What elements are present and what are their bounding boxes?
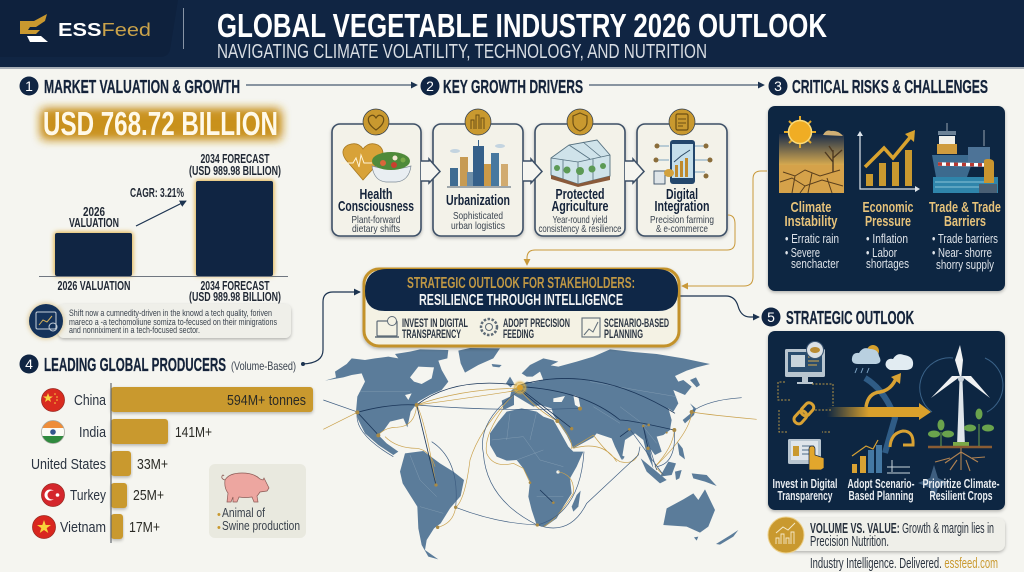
volume vs value callout xyxy=(768,517,1005,553)
swine production card: Animal of xyxy=(222,506,265,520)
section heading 1: 1 xyxy=(25,78,33,94)
panel: strategic outlook actions xyxy=(768,331,1005,510)
section heading 2: 2 xyxy=(426,78,434,94)
column: trade barriers: • Near- shorre xyxy=(932,246,992,260)
section heading 3: 3 xyxy=(774,78,782,94)
market value headline: USD 768.72 BILLION xyxy=(43,105,278,142)
column: climate instability: Climate xyxy=(790,199,832,216)
producers bar chart xyxy=(31,383,313,543)
swine production card: • xyxy=(217,509,221,521)
section heading 1 xyxy=(20,76,240,97)
connector: drivers to strategic box xyxy=(527,215,735,265)
column: economic pressure: Pressure xyxy=(865,213,911,230)
driver arrows between cards xyxy=(421,159,644,183)
section heading 2: KEY GROWTH DRIVERS xyxy=(443,76,583,97)
bar: 2026 valuation: 2026 VALUATION xyxy=(58,279,130,293)
swine production card: • xyxy=(217,522,221,534)
driver card: digital integration: Integration xyxy=(654,198,710,215)
column: trade barriers xyxy=(929,123,1001,272)
bar: 2034 forecast: 2034 FORECAST xyxy=(200,279,270,293)
driver card: protected agriculture xyxy=(535,109,625,236)
section heading 5 xyxy=(762,307,914,328)
item: precision feeding: FEEDING xyxy=(503,327,534,341)
column: climate instability: • Severe xyxy=(785,246,820,260)
item: digital transparency: TRANSPARENCY xyxy=(402,327,461,341)
bar: 2034 forecast: (USD 989.98 BILLION) xyxy=(189,164,281,178)
icon: heart and salad xyxy=(341,144,411,182)
note text: and nonniximent in a tech-focused sector. xyxy=(69,325,200,336)
row: United States: United States xyxy=(31,457,106,473)
row: Turkey: Turkey xyxy=(70,488,107,504)
driver card: health consciousness: dietary shifts xyxy=(352,223,400,235)
row: India: India xyxy=(79,425,107,441)
row: United States: 33M+ xyxy=(137,457,168,473)
callout text: Precision Nutrition. xyxy=(810,533,889,550)
column: trade barriers: Barriers xyxy=(944,213,986,230)
bar: 2026 valuation: VALUATION xyxy=(69,216,119,230)
driver card: health consciousness: Health xyxy=(360,186,392,203)
row: India: 141M+ xyxy=(175,425,212,441)
column: digital transparency: Transparency xyxy=(778,489,833,503)
icon badge xyxy=(567,109,593,135)
note text: Shift now a cumnedity-driven in the knowd a tech quality, foriven xyxy=(69,308,272,319)
driver card: health consciousness: Plant-forward xyxy=(352,214,401,226)
icon: clouds and charts xyxy=(827,345,931,473)
box heading: STRATEGIC OUTLOOK FOR STAKEHOLDERS: xyxy=(407,275,635,292)
connector: producers to strategic box xyxy=(303,292,360,364)
driver card: protected agriculture: Agriculture xyxy=(552,198,608,215)
CAGR arrow and label xyxy=(130,186,186,226)
driver card: protected agriculture: consistency & resilience xyxy=(538,223,622,235)
strategic outlook box: RESILIENCE THROUGH INTELLIGENCE xyxy=(419,292,623,309)
icon: greenhouse xyxy=(551,140,610,187)
icon badge xyxy=(363,109,389,135)
item: scenario planning: PLANNING xyxy=(604,327,643,341)
header banner xyxy=(0,0,1024,69)
item: scenario planning xyxy=(582,316,669,341)
row: India xyxy=(41,419,212,444)
row: China xyxy=(42,387,313,412)
icon: rising chart xyxy=(857,130,920,192)
row: China: 594M+ tonnes xyxy=(227,393,306,409)
bar: 2034 forecast xyxy=(189,152,281,304)
driver card: protected agriculture: Year-round yield xyxy=(552,214,608,226)
driver card: digital integration: & e-commerce xyxy=(656,223,708,235)
world trade map xyxy=(323,348,757,559)
section heading 4: (Volume-Based) xyxy=(231,359,296,373)
column: economic pressure: Economic xyxy=(862,199,914,216)
row: China: China xyxy=(74,393,107,409)
column: economic pressure: • Labor xyxy=(866,246,897,260)
icon: city skyline xyxy=(447,140,511,187)
swine production card xyxy=(209,464,306,538)
column: climate instability: • Erratic rain xyxy=(785,232,839,246)
inland seas and lakes xyxy=(405,367,581,474)
icon badge xyxy=(465,109,491,135)
row: Vietnam: Vietnam xyxy=(60,520,106,536)
bar chart: market growth xyxy=(39,152,288,304)
icon: tech dashboard xyxy=(28,303,64,339)
driver card: health consciousness: Consciousness xyxy=(338,198,414,215)
market note callout xyxy=(28,303,291,339)
logo wordmark: ESS Feed xyxy=(58,19,151,40)
section heading 2 xyxy=(420,76,583,97)
subtitle: NAVIGATING CLIMATE VOLATILITY, TECHNOLOGY, AND NUTRITION xyxy=(217,41,707,63)
arrow: section 1 to 2 xyxy=(246,84,417,86)
icon: pig xyxy=(222,473,269,502)
column: trade barriers: shorry supply xyxy=(936,258,995,272)
column: resilient crops: Resilient Crops xyxy=(930,489,993,503)
icon: monitor and chain xyxy=(778,342,833,470)
bar: 2034 forecast: (USD 989.98 BILLION) xyxy=(189,290,281,304)
callout text xyxy=(810,520,994,550)
column: economic pressure xyxy=(857,130,920,271)
column: climate instability xyxy=(779,116,844,271)
driver card: digital integration: Precision farming xyxy=(650,214,714,226)
section heading 1: MARKET VALUATION & GROWTH xyxy=(44,76,240,97)
column: scenario planning xyxy=(827,345,931,503)
bar: 2034 forecast: 2034 FORECAST xyxy=(200,152,270,166)
row: United States xyxy=(31,451,168,476)
connector: risks to strategic box xyxy=(682,171,767,286)
Europe hub xyxy=(513,381,527,394)
note text: mareco a -a techomoliune somiza to-fecused on their minigrations xyxy=(69,317,277,328)
swine production card: Swine production xyxy=(222,519,300,533)
landmasses xyxy=(325,348,738,559)
driver card: urbanization: Sophisticated xyxy=(453,210,503,222)
arrow: section 2 to 3 xyxy=(589,84,764,86)
trade routes xyxy=(323,378,757,528)
item: digital transparency xyxy=(375,316,468,341)
title: GLOBAL VEGETABLE INDUSTRY 2026 OUTLOOK xyxy=(217,7,827,44)
item: scenario planning: SCENARIO-BASED xyxy=(604,316,669,330)
item: digital transparency: INVEST IN DIGITAL xyxy=(402,316,468,330)
driver card: digital integration: Digital xyxy=(666,186,698,203)
logo panel xyxy=(0,0,178,57)
driver card: protected agriculture: Protected xyxy=(556,186,604,203)
CAGR arrow and label: CAGR: 3.21% xyxy=(130,186,184,200)
item: precision feeding xyxy=(481,316,570,341)
country borders xyxy=(360,382,677,513)
icon: wind turbine and crops xyxy=(920,345,1003,471)
route hubs xyxy=(355,403,694,529)
icon: growth chart badge xyxy=(768,517,804,553)
section heading 4: LEADING GLOBAL PRODUCERS xyxy=(44,354,226,375)
column: resilient crops xyxy=(918,345,1003,503)
note text xyxy=(69,308,277,336)
driver card: urbanization: Urbanization xyxy=(446,192,510,209)
section heading 4: 4 xyxy=(25,356,33,372)
bar: 2026 valuation: 2026 xyxy=(83,205,105,219)
column: climate instability: Instability xyxy=(784,213,838,230)
column: digital transparency: Invest in Digital xyxy=(772,477,838,491)
driver card: urbanization: urban logistics xyxy=(451,220,505,232)
row: Vietnam xyxy=(32,514,160,539)
footer tagline: Industry Intelligence. Delivered. essfeed.com xyxy=(810,555,998,572)
column: scenario planning: Adopt Scenario- xyxy=(848,477,914,491)
panel: critical risks xyxy=(768,106,1005,291)
row: Turkey xyxy=(42,483,164,508)
icon badge xyxy=(669,109,695,135)
row: Turkey: 25M+ xyxy=(133,488,164,504)
section heading 5: STRATEGIC OUTLOOK xyxy=(786,307,914,328)
icon: drought scene xyxy=(779,116,844,193)
section heading 5: 5 xyxy=(767,309,775,325)
bar: 2026 valuation xyxy=(54,205,133,293)
strategic outlook box xyxy=(364,269,679,346)
column: scenario planning: Based Planning xyxy=(848,489,914,503)
column: economic pressure: • Inflation xyxy=(866,232,908,246)
driver card: urbanization xyxy=(433,109,523,236)
driver card: digital integration xyxy=(637,109,727,236)
column: climate instability: senchacter xyxy=(791,257,839,271)
column: trade barriers: • Trade barriers xyxy=(932,232,998,246)
driver card: health consciousness xyxy=(332,109,421,236)
column: digital transparency xyxy=(772,342,838,503)
icon: ship and barrier xyxy=(932,123,998,193)
row: Vietnam: 17M+ xyxy=(129,520,160,536)
icon: smartphone network xyxy=(654,140,712,184)
connector: strategic box to outlook xyxy=(679,296,759,317)
item: precision feeding: ADOPT PRECISION xyxy=(503,316,570,330)
column: economic pressure: shortages xyxy=(866,257,909,271)
